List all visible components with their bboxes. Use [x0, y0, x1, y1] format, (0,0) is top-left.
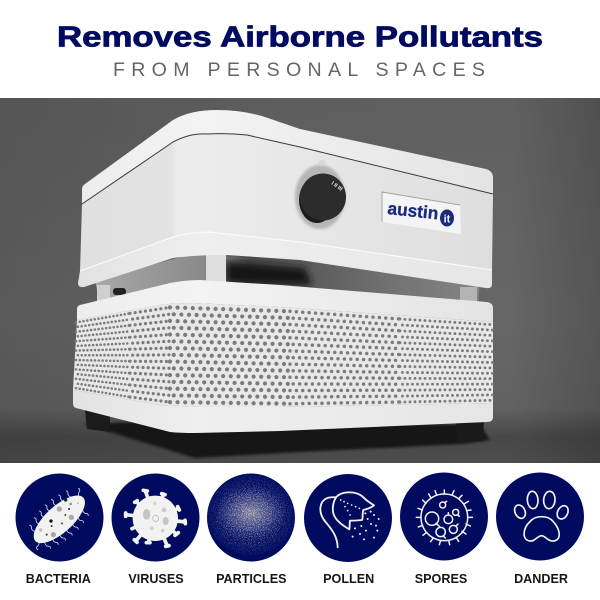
dark gap between housings	[96, 255, 480, 302]
subtitle: FROM PERSONAL SPACES	[113, 59, 485, 81]
right support leg	[460, 287, 477, 302]
control knob	[295, 160, 346, 229]
it badge: it	[444, 214, 451, 226]
upper housing lid	[82, 110, 493, 204]
lower trim band	[78, 232, 492, 288]
labels	[26, 572, 568, 586]
icon: virus	[112, 474, 200, 562]
spore spikes	[416, 490, 472, 545]
icon: dander paw print	[496, 472, 584, 560]
virus body	[133, 496, 178, 541]
product photo: air purifier	[0, 98, 600, 463]
spore outer wall	[421, 494, 468, 541]
bacterium body	[26, 488, 92, 551]
virus spikes	[126, 490, 185, 546]
front-left foot	[85, 410, 110, 432]
base bottom band	[73, 390, 493, 433]
speed markings: I II III	[330, 181, 344, 193]
spore cells	[425, 501, 459, 538]
bacterium flagella	[19, 481, 99, 559]
austin wordmark: austin	[387, 198, 439, 223]
deep shadow in gap	[226, 262, 312, 285]
icon: pollen	[304, 474, 392, 562]
label: particles: PARTICLES	[216, 572, 287, 586]
logo plate	[382, 192, 461, 234]
left rear support leg	[97, 285, 110, 301]
perforated mesh panel	[73, 303, 493, 407]
icon: particles	[207, 473, 295, 562]
knob recess	[295, 165, 345, 229]
knob cap	[300, 174, 346, 220]
title: Removes Airborne Pollutants	[57, 22, 543, 54]
label: spores: SPORES	[415, 572, 467, 586]
icon: spores	[400, 472, 488, 560]
base top band	[77, 280, 493, 322]
lid seam	[82, 134, 493, 204]
head profile	[320, 492, 374, 547]
label: dander: DANDER	[514, 572, 568, 586]
particle speckle	[207, 473, 295, 561]
paw pad	[524, 517, 559, 541]
bacterium spots	[39, 498, 79, 537]
icon: bacteria	[16, 474, 104, 562]
particle cloud glow	[214, 486, 288, 540]
pollen dots	[340, 499, 380, 540]
centre support leg	[206, 255, 226, 282]
label: bacteria: BACTERIA	[26, 572, 91, 586]
pointer tick	[318, 160, 326, 166]
upper housing body	[80, 134, 493, 272]
plate recess edge	[382, 192, 460, 222]
virus spots	[143, 502, 169, 532]
floor shadow	[84, 420, 490, 458]
front-right foot	[456, 422, 484, 441]
trim highlight	[80, 232, 492, 271]
knob skirt	[299, 185, 326, 223]
paw toes	[513, 491, 570, 521]
label: pollen: POLLEN	[323, 572, 374, 586]
dark screw	[113, 288, 126, 295]
label: viruses: VIRUSES	[128, 572, 184, 586]
backdrop wall and floor	[0, 98, 600, 463]
